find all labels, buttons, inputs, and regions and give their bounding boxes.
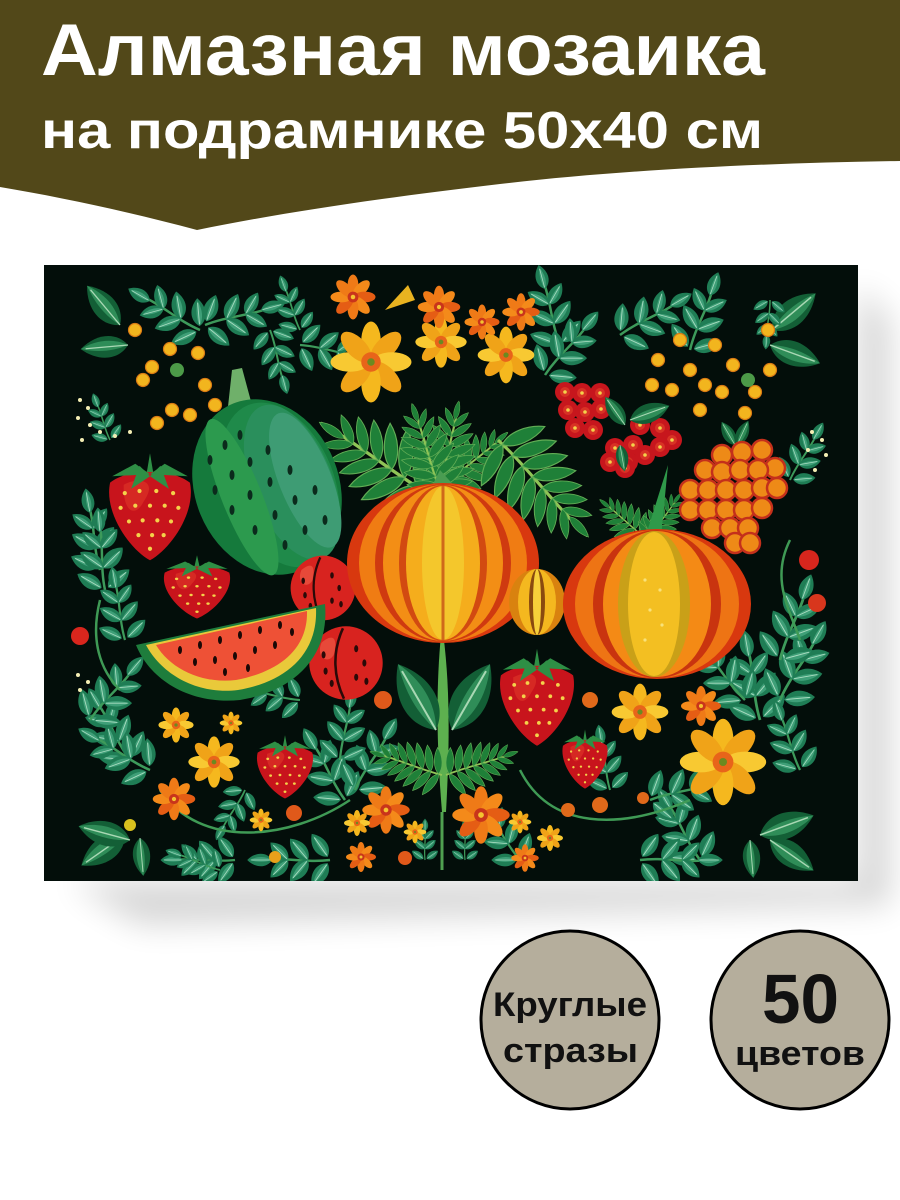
lower flowers <box>124 684 766 872</box>
badge: 50 colours <box>711 931 889 1109</box>
top flowers <box>128 274 540 402</box>
subtitle: на подрамнике 50х40 см <box>41 102 763 160</box>
scattered dots <box>76 398 828 692</box>
badge: round rhinestones <box>481 931 659 1109</box>
canvas shadow <box>70 285 890 925</box>
center pumpkin <box>347 470 539 643</box>
right pumpkin <box>563 529 751 679</box>
banner shape <box>0 0 900 230</box>
badge circle <box>711 931 889 1109</box>
yellow berry clusters <box>136 324 776 430</box>
title: Алмазная мозаика <box>41 10 767 91</box>
vines <box>96 540 800 832</box>
banner with title <box>0 0 900 230</box>
sprigs <box>56 257 854 891</box>
badge text: Круглые <box>493 986 647 1024</box>
melon <box>192 368 342 576</box>
watermelon slice <box>136 604 325 701</box>
badge: 50 colours: цветов <box>735 1035 865 1073</box>
corner leaves <box>74 278 824 880</box>
lower central plant <box>370 642 518 870</box>
strawberries <box>109 453 608 799</box>
foliage border <box>56 257 854 891</box>
central fern fronds <box>318 400 682 540</box>
badge: round rhinestones: стразы <box>503 1032 638 1070</box>
badge text: 50 <box>762 960 839 1038</box>
canvas background <box>44 265 858 881</box>
small gourd <box>509 569 565 635</box>
badge circle <box>481 931 659 1109</box>
red round fruits <box>291 556 383 700</box>
canvas painting <box>44 257 858 891</box>
red raspberries <box>555 382 682 478</box>
small red side fruits <box>71 550 826 645</box>
orange berry bunch <box>680 418 787 553</box>
